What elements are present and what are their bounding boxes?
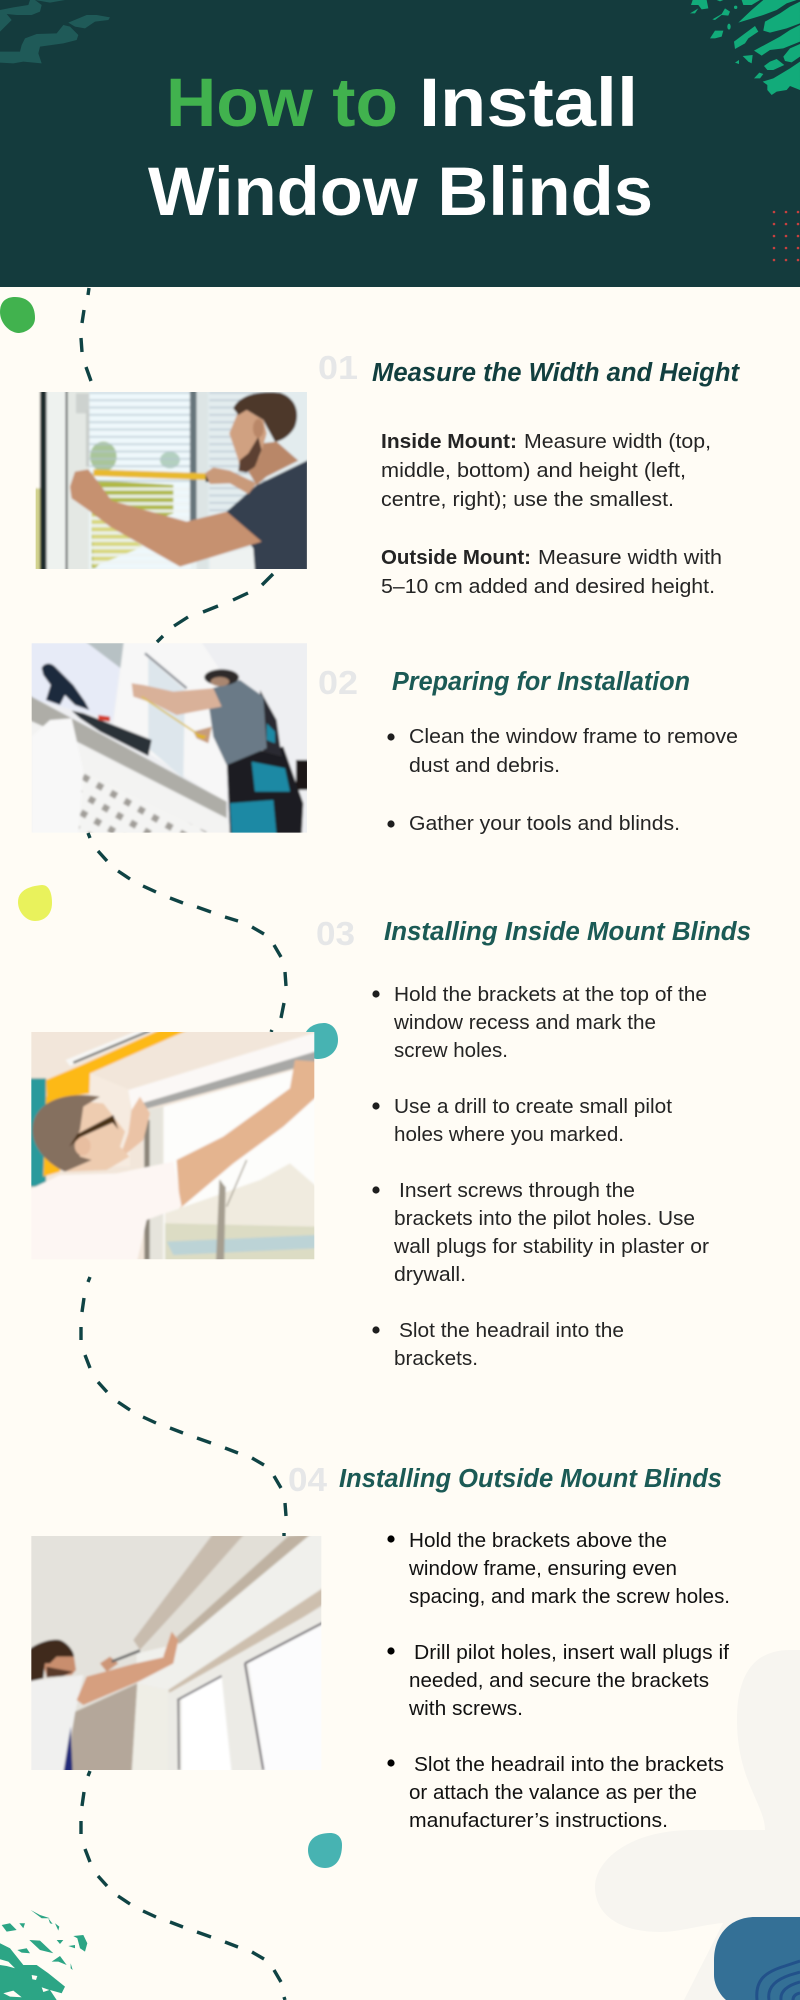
step number 04: 04	[288, 1462, 327, 1499]
panel: step 1 measure	[32, 350, 741, 598]
step number 01: 01	[318, 350, 358, 387]
text block: outside mount	[381, 546, 722, 598]
text block: inside mount	[381, 430, 711, 511]
heading: preparing: Preparing for Installation	[392, 668, 690, 696]
text block: inside mount: Inside Mount:	[381, 430, 517, 453]
photo: man fitting blind above window	[28, 1533, 325, 1773]
dashed connector: photo 1 to photo 2	[157, 574, 273, 642]
blob: teal near photo 4	[308, 1833, 342, 1868]
bullet list: inside mount blinds: Hold the brackets at the top of the	[394, 983, 707, 1006]
bullet list: outside mount blinds: needed, and secure the brackets	[409, 1669, 709, 1692]
dashed connector: header to photo 1	[81, 288, 91, 381]
decorative pale blob, bottom right	[595, 1650, 800, 2000]
photo: man measuring window	[32, 388, 312, 573]
title	[148, 64, 653, 230]
text block: outside mount: Measure width with	[538, 546, 722, 569]
bullet list: inside mount blinds: Use a drill to create small pilot	[394, 1095, 672, 1118]
bullet list: outside mount blinds: manufacturer’s instructions.	[409, 1809, 668, 1832]
blob: green	[0, 297, 35, 333]
bullet list: inside mount blinds: wall plugs for stability in plaster or	[393, 1235, 709, 1258]
dashed connector: photo 3 to photo 4	[81, 1277, 286, 1536]
header red dot grid	[773, 211, 799, 261]
bullet list: inside mount blinds: brackets.	[394, 1347, 478, 1370]
bottom-left brush texture	[0, 1910, 87, 2000]
bullet list: outside mount blinds: Drill pilot holes, insert wall plugs if	[414, 1641, 729, 1664]
header brush texture, top left	[0, 0, 110, 63]
title: Install	[419, 64, 638, 141]
text block: outside mount: 5–10 cm added and desired height.	[381, 575, 715, 598]
text block: inside mount: centre, right); use the smallest.	[381, 488, 674, 511]
blob: teal behind photo 3	[306, 1023, 338, 1059]
step number 02: 02	[318, 665, 358, 702]
title: Window Blinds	[148, 153, 653, 230]
bullet list: outside mount blinds: Slot the headrail into the brackets	[414, 1753, 724, 1776]
photo: man fitting headrail inside recess	[28, 1028, 318, 1263]
heading: outside mount blinds: Installing Outside Mount Blinds	[339, 1465, 722, 1493]
bullet list: preparing: dust and debris.	[409, 754, 560, 777]
bullet list: inside mount blinds: Slot the headrail into the	[399, 1319, 624, 1342]
panel: step 3 inside mount	[28, 916, 751, 1370]
bullet list: inside mount blinds	[372, 983, 709, 1370]
text block: inside mount: middle, bottom) and height (left,	[381, 459, 686, 482]
photo: worker on ladder with drill and toolbox	[28, 640, 312, 837]
text block: outside mount: Outside Mount:	[381, 546, 531, 569]
bullet list: inside mount blinds: Insert screws through the	[399, 1179, 635, 1202]
bullet list: preparing: Clean the window frame to remove	[409, 725, 738, 748]
header band	[0, 0, 800, 287]
heading: measure: Measure the Width and Height	[372, 359, 741, 387]
title: How to	[166, 64, 398, 141]
bullet list: inside mount blinds: holes where you marked.	[394, 1123, 624, 1146]
dashed connector: photo 4 to page bottom	[81, 1771, 285, 2000]
bullet list: inside mount blinds: screw holes.	[394, 1039, 508, 1062]
text block: inside mount: Measure width (top,	[524, 430, 711, 453]
bullet list: preparing	[387, 725, 738, 835]
bullet list: outside mount blinds: window frame, ensuring even	[408, 1557, 677, 1580]
bullet list: outside mount blinds: with screws.	[408, 1697, 523, 1720]
panel: step 2 preparing	[28, 640, 738, 837]
bullet list: outside mount blinds: or attach the valance as per the	[409, 1781, 697, 1804]
bullet list: outside mount blinds: Hold the brackets above the	[409, 1529, 667, 1552]
bullet list: inside mount blinds: brackets into the pilot holes. Use	[394, 1207, 695, 1230]
header brush texture, top right	[690, 0, 800, 95]
bullet list: inside mount blinds: drywall.	[394, 1263, 466, 1286]
heading: inside mount blinds: Installing Inside Mount Blinds	[384, 918, 751, 946]
bullet list: inside mount blinds: window recess and mark the	[393, 1011, 656, 1034]
bullet list: preparing: Gather your tools and blinds.	[409, 812, 680, 835]
panel: step 4 outside mount	[28, 1462, 730, 1832]
dashed connector: photo 2 to photo 3	[88, 833, 286, 1032]
decorative blue rounded block	[714, 1917, 800, 2000]
blob: yellow	[18, 885, 52, 921]
step number 03: 03	[316, 916, 355, 953]
bullet list: outside mount blinds	[387, 1529, 730, 1832]
bullet list: outside mount blinds: spacing, and mark the screw holes.	[409, 1585, 730, 1608]
